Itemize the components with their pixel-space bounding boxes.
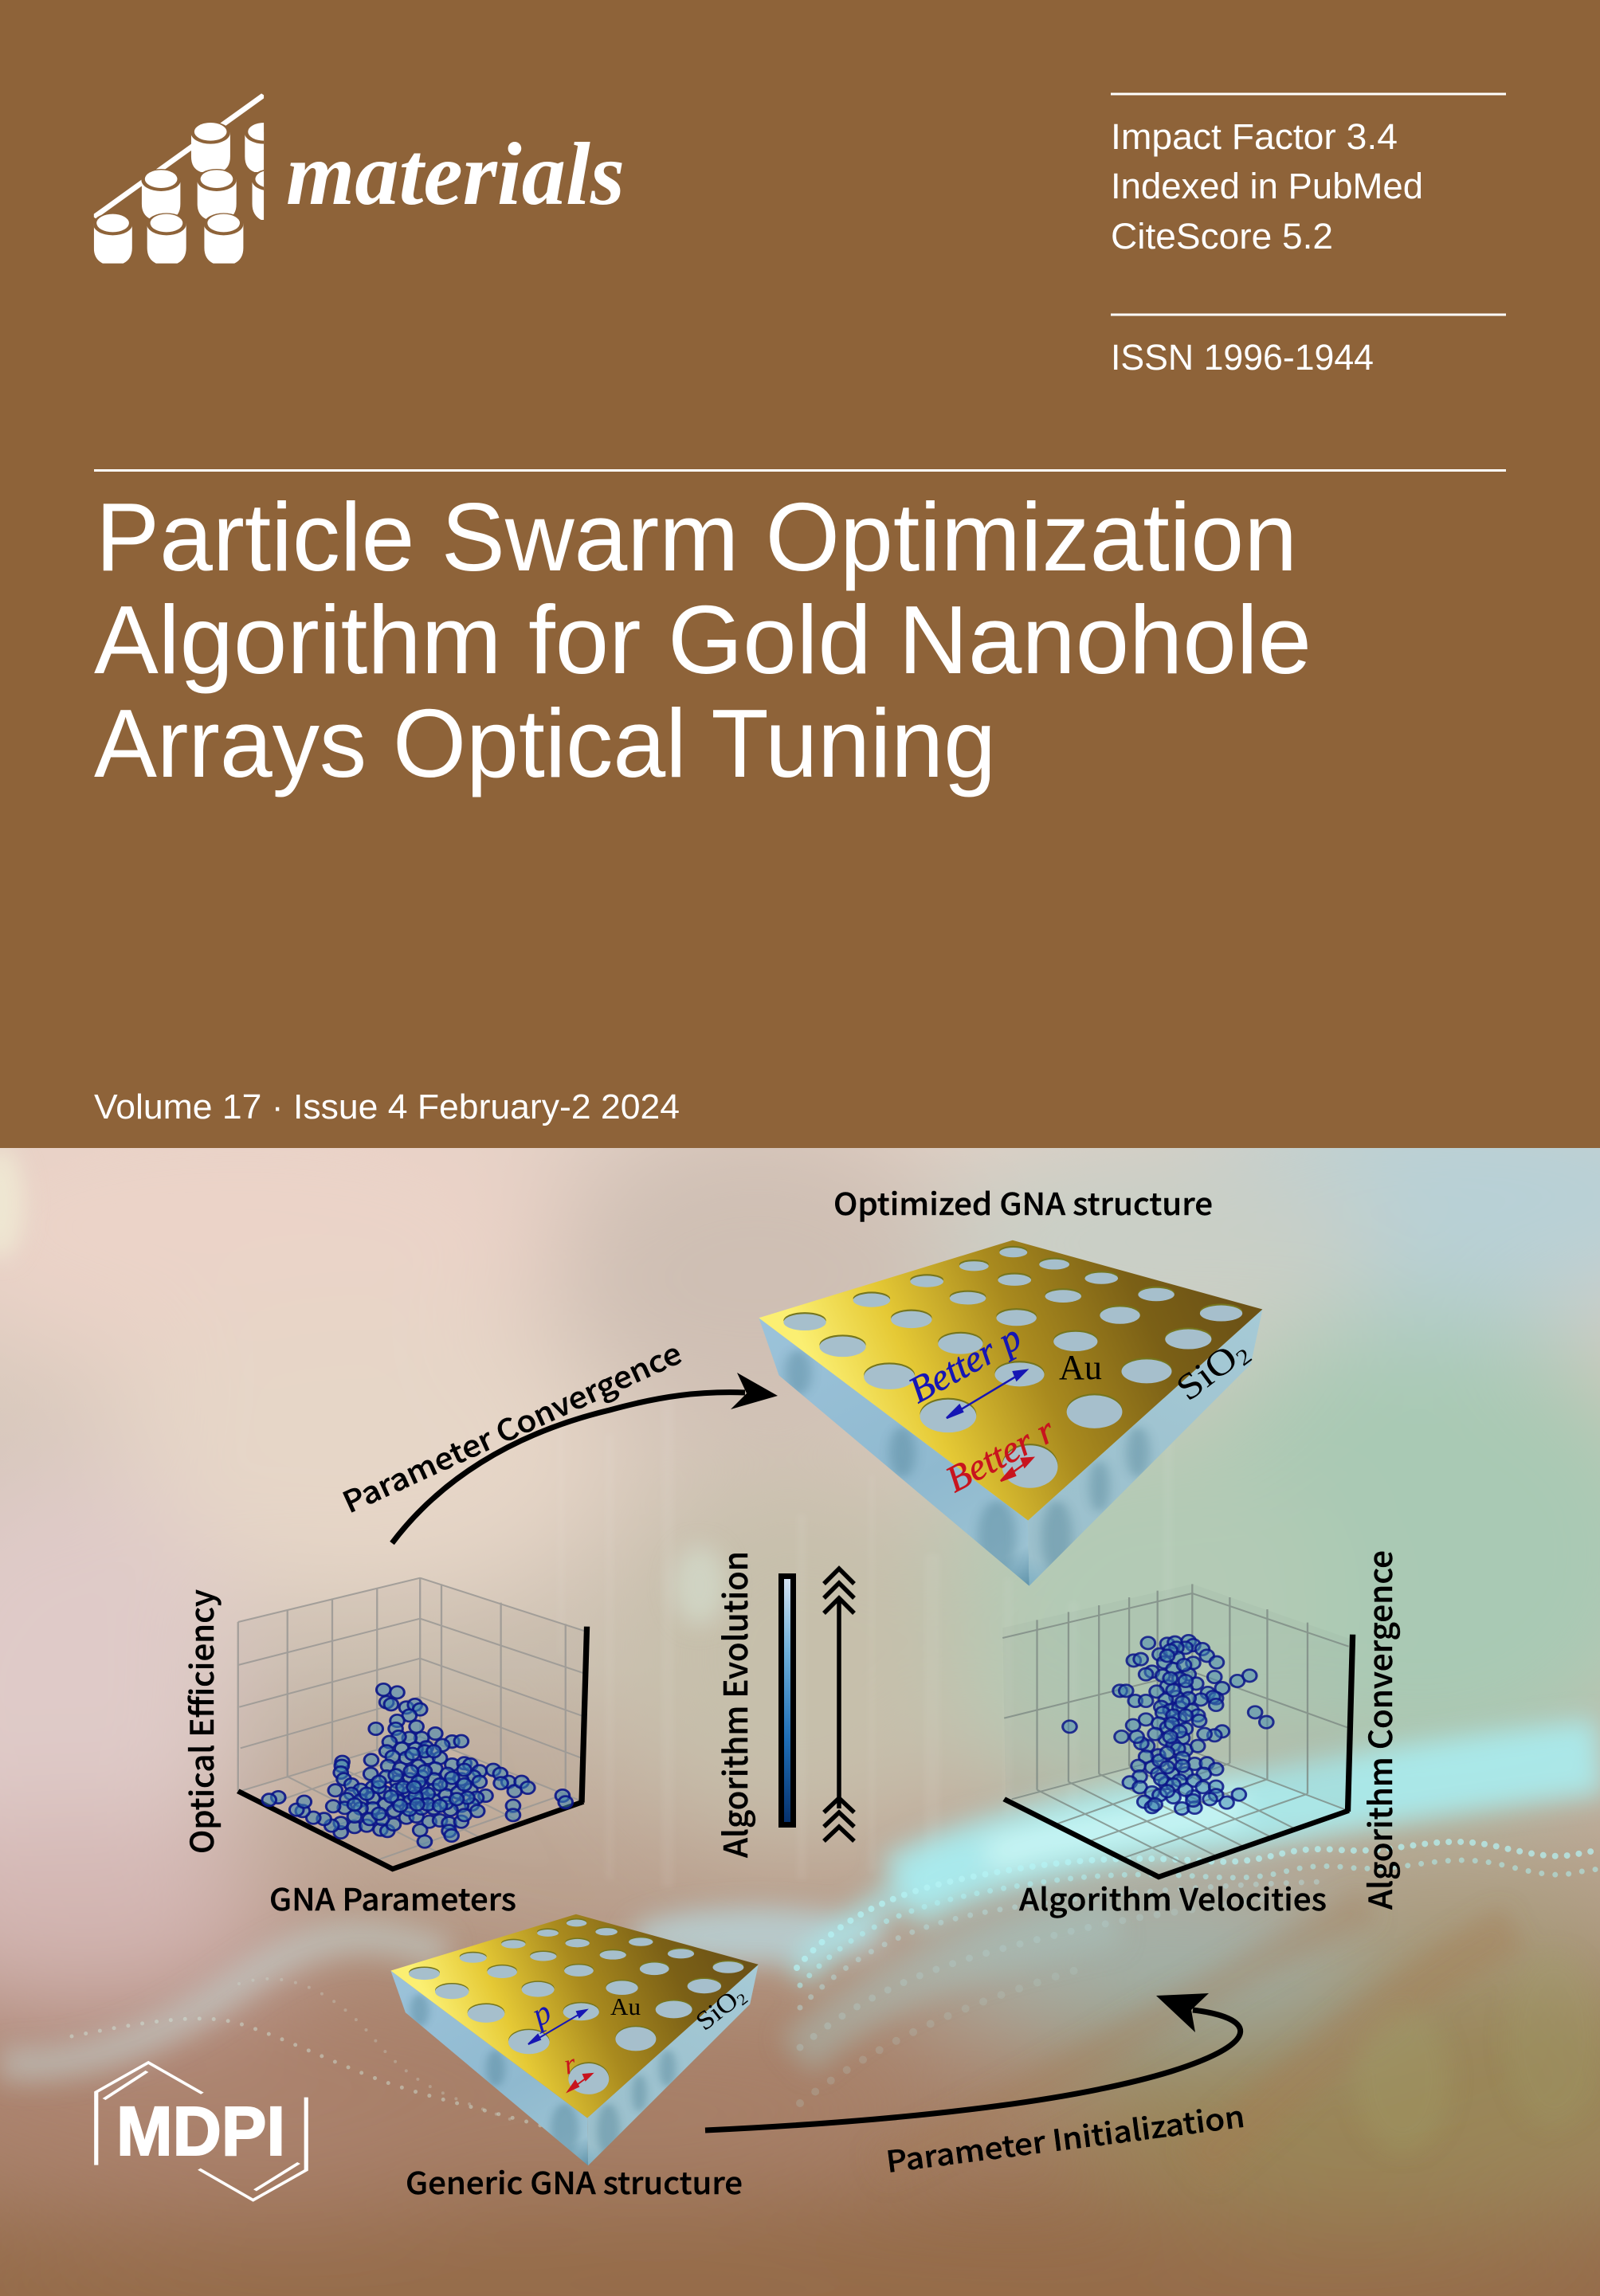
label: SiO2: 2	[1232, 1344, 1257, 1371]
label: Better p: Better p	[902, 1316, 1028, 1412]
label: SiO2: SiO	[691, 1988, 740, 2036]
arrow: p spacing	[528, 2010, 586, 2044]
grid lines	[1002, 1584, 1349, 1867]
journal name: materials	[286, 125, 625, 224]
grid lines	[238, 1577, 585, 1860]
label: Au: Au	[610, 1992, 641, 2020]
label: generic structure: Generic GNA structure	[406, 2159, 743, 2203]
label: p: p	[524, 1993, 557, 2035]
arrow: p spacing	[947, 1370, 1026, 1418]
metrics block	[1111, 92, 1506, 378]
arrow: r radius	[1001, 1458, 1033, 1481]
label: algorithm evolution: Algorithm Evolution	[709, 1551, 757, 1858]
top arrow: parameter convergence	[392, 1373, 778, 1543]
panel: optimized gold nanohole plate	[759, 1240, 1262, 1586]
article title: Algorithm for Gold Nanohole	[94, 586, 1312, 694]
chart: GNA parameters vs optical efficiency	[238, 1577, 587, 1869]
publisher logo: MDPI: MDPI	[116, 2093, 285, 2170]
arrow: algorithm evolution	[824, 1569, 854, 1841]
chart walls	[238, 1577, 585, 1802]
label: SiO2: SiO	[1168, 1342, 1238, 1409]
metrics block: Indexed in PubMed	[1111, 166, 1423, 206]
axes	[238, 1627, 587, 1869]
arrow: r radius	[568, 2074, 592, 2091]
publisher logo: MDPI	[96, 2063, 306, 2200]
background artwork panel	[0, 1068, 1600, 2296]
label: Better r: Better r	[939, 1409, 1062, 1501]
chart: algorithm velocities vs convergence	[1002, 1584, 1353, 1877]
heading: optimized structure: Optimized GNA structure	[833, 1180, 1213, 1224]
metrics block: CiteScore 5.2	[1111, 216, 1333, 257]
label: r: r	[560, 2047, 579, 2081]
article title: Particle Swarm Optimization	[96, 483, 1297, 591]
label: SiO2: 2	[734, 1990, 751, 2009]
article title	[94, 469, 1506, 797]
journal logo icon: cylinders	[94, 93, 265, 264]
bottom arrow: parameter initialization	[705, 1993, 1241, 2130]
scatter points	[1063, 1635, 1273, 1815]
label: optical efficiency axis: Optical Efficiency	[177, 1589, 223, 1854]
label: parameter convergence: Parameter Convergence	[335, 1330, 688, 1522]
axes	[1004, 1635, 1353, 1877]
header panel	[0, 0, 1600, 1148]
color bar	[781, 1576, 794, 1824]
chart walls	[1002, 1584, 1349, 1810]
scatter points	[262, 1683, 573, 1847]
label: algorithm velocities: Algorithm Velocities	[1019, 1875, 1327, 1919]
metrics block: ISSN 1996-1944	[1111, 337, 1374, 378]
panel: generic gold nanohole plate	[390, 1914, 759, 2165]
label: Au: Au	[1059, 1348, 1102, 1387]
issue line: Volume 17 · Issue 4 February-2 2024	[94, 1087, 680, 1126]
label: algorithm convergence axis: Algorithm Convergence	[1355, 1550, 1402, 1910]
metrics block: Impact Factor 3.4	[1111, 116, 1398, 157]
article title: Arrays Optical Tuning	[94, 689, 996, 797]
label: parameter initialization: Parameter Initialization	[884, 2093, 1247, 2181]
label: GNA parameters: GNA Parameters	[269, 1875, 516, 1919]
